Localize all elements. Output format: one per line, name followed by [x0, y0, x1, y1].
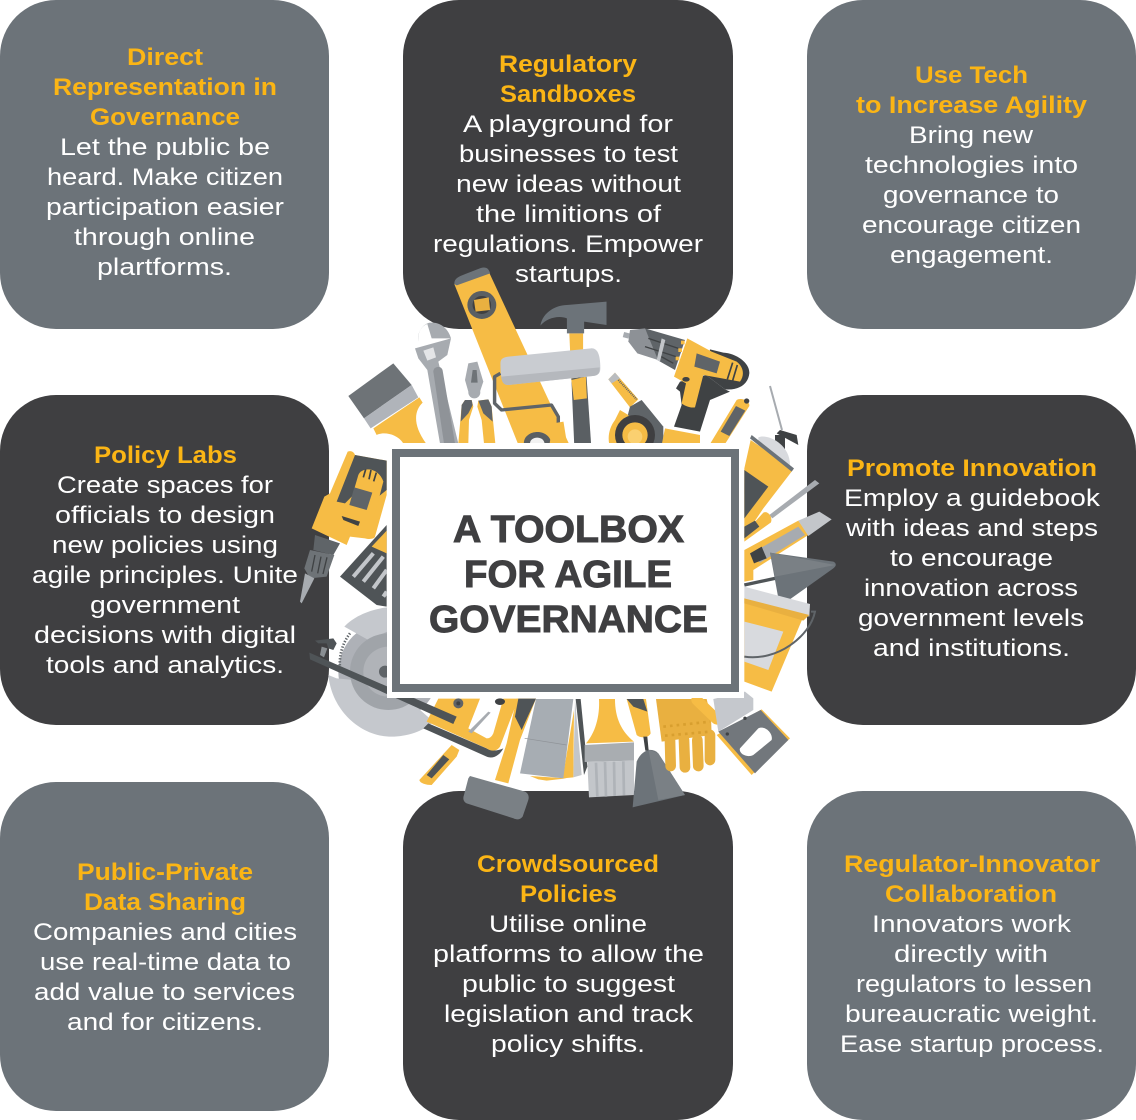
panel: use tech to increase agility: engagement.	[890, 242, 1053, 269]
panel: crowdsourced policies: Crowdsourced	[477, 851, 659, 878]
panel: promote innovation	[807, 395, 1136, 725]
panel: direct representation in governance: through online	[74, 224, 255, 251]
panel: regulator-innovator collaboration: Collaboration	[885, 881, 1057, 908]
panel: regulator-innovator collaboration: directly with	[894, 941, 1048, 968]
panel: promote innovation: and institutions.	[873, 635, 1070, 662]
panel: use tech to increase agility: technologies into	[865, 152, 1078, 179]
panel: regulatory sandboxes: A playground for	[463, 111, 673, 138]
panel: crowdsourced policies: legislation and track	[444, 1001, 694, 1028]
tools: tape measure, drill and screwdriver	[608, 328, 749, 455]
panel: use tech to increase agility: to Increase Agility	[856, 92, 1088, 119]
icon: utility knife	[744, 512, 832, 582]
panel: regulator-innovator collaboration: Regulator-Innovator	[844, 851, 1100, 878]
panel: promote innovation: with ideas and steps	[845, 515, 1098, 542]
panel: promote innovation: Employ a guidebook	[844, 485, 1101, 512]
panel: crowdsourced policies: platforms to allow the	[433, 941, 704, 968]
panel: crowdsourced policies: public to suggest	[462, 971, 675, 998]
panel: regulator-innovator collaboration	[807, 791, 1136, 1120]
panel: regulator-innovator collaboration: bureaucratic weight.	[845, 1001, 1098, 1028]
panel: public-private data sharing	[0, 782, 329, 1111]
panel: public-private data sharing: Data Sharing	[84, 889, 246, 916]
icon: pliers	[458, 362, 495, 443]
icon: cordless drill	[623, 328, 749, 445]
panel: policy labs: Create spaces for	[57, 472, 273, 499]
icon: work glove	[656, 699, 717, 767]
panel: regulatory sandboxes: Regulatory	[499, 51, 638, 78]
title: GOVERNANCE	[429, 599, 708, 641]
panel: policy labs: tools and analytics.	[46, 652, 284, 679]
panel: regulatory sandboxes: the limitions of	[476, 201, 661, 228]
central title box	[387, 443, 744, 698]
panel: policy labs: agile principles. Unite	[32, 562, 298, 589]
icon: adjustable wrench	[415, 323, 458, 443]
panel: use tech to increase agility: encourage citizen	[862, 212, 1081, 239]
icon: claw hammer	[540, 302, 607, 443]
panel: regulator-innovator collaboration: regulators to lessen	[856, 971, 1092, 998]
tools: level, hammer and roller	[454, 268, 607, 443]
tools on the right of the central box	[744, 386, 836, 692]
tools on the left of the central box	[300, 451, 387, 607]
icon: large drill	[300, 451, 387, 603]
panel: crowdsourced policies	[403, 791, 733, 1120]
icon: spatula	[627, 699, 685, 807]
icon: paint roller	[495, 348, 600, 443]
icon: bucket	[744, 587, 815, 692]
icon: colour swatches	[520, 699, 587, 781]
panel: use tech to increase agility	[807, 0, 1136, 329]
panel: direct representation in governance: Representation in	[53, 74, 277, 101]
panel: direct representation in governance: Direct	[127, 44, 203, 71]
panel: crowdsourced policies: policy shifts.	[491, 1031, 645, 1058]
icon: tape measure	[608, 373, 663, 455]
panel: direct representation in governance: Governance	[90, 104, 240, 131]
panel: regulatory sandboxes: businesses to test	[459, 141, 678, 168]
icon: yellow screwdriver	[710, 398, 749, 444]
icon: dark bar clamp	[309, 638, 457, 724]
panel: policy labs: Policy Labs	[94, 442, 237, 469]
panel: crowdsourced policies: Utilise online	[489, 911, 647, 938]
tools: saw, square, screwdriver and mallet	[309, 607, 536, 819]
panel: public-private data sharing: use real-time data to	[40, 949, 291, 976]
panel: use tech to increase agility: Bring new	[909, 122, 1034, 149]
panel: regulatory sandboxes: Sandboxes	[500, 81, 636, 108]
icon: trowel	[744, 553, 836, 603]
panel: regulatory sandboxes: new ideas without	[456, 171, 681, 198]
panel: public-private data sharing: Public-Private	[77, 859, 253, 886]
tools: swatches, brush, spatula, glove and handsaw	[520, 692, 790, 807]
panel: public-private data sharing: Companies and cities	[33, 919, 297, 946]
icon: small screwdriver	[419, 712, 491, 785]
panel: crowdsourced policies: Policies	[520, 881, 617, 908]
title: FOR AGILE	[464, 554, 672, 596]
icon: paint brush	[348, 363, 426, 443]
panel: public-private data sharing: and for citizens.	[67, 1009, 263, 1036]
panel: policy labs: decisions with digital	[34, 622, 296, 649]
panel: use tech to increase agility: Use Tech	[915, 62, 1028, 89]
icon: spirit level	[454, 268, 569, 443]
panel: regulatory sandboxes	[403, 0, 733, 329]
panel: policy labs	[0, 395, 329, 725]
icon: hand saw	[713, 692, 790, 775]
panel: regulatory sandboxes: regulations. Empower	[433, 231, 703, 258]
panel: regulatory sandboxes: startups.	[515, 261, 622, 288]
icon: mallet	[463, 699, 536, 819]
panel: direct representation in governance: plartforms.	[97, 254, 232, 281]
panel: policy labs: new policies using	[52, 532, 278, 559]
panel: promote innovation: Promote Innovation	[847, 455, 1097, 482]
panel: direct representation in governance	[0, 0, 329, 329]
icon: wide paint brush	[585, 699, 634, 797]
panel: policy labs: officials to design	[55, 502, 275, 529]
panel: regulator-innovator collaboration: Innovators work	[872, 911, 1072, 938]
icon: circular saw	[328, 607, 438, 737]
title	[429, 509, 708, 641]
icon: flat screwdriver	[744, 480, 819, 542]
panel: promote innovation: innovation across	[864, 575, 1078, 602]
tools: brush, wrench and pliers	[348, 323, 495, 443]
panel: public-private data sharing: add value to services	[34, 979, 295, 1006]
icon: spray can	[744, 386, 798, 537]
icon: drill bit set	[340, 525, 387, 607]
panel: direct representation in governance: Let the public be	[60, 134, 270, 161]
panel: use tech to increase agility: governance to	[883, 182, 1059, 209]
panel: policy labs: government	[90, 592, 240, 619]
icon: framing square	[423, 698, 518, 757]
panel: direct representation in governance: heard. Make citizen	[47, 164, 283, 191]
title: A TOOLBOX	[453, 509, 685, 551]
panel: regulator-innovator collaboration: Ease startup process.	[840, 1031, 1104, 1058]
panel: promote innovation: to encourage	[890, 545, 1053, 572]
panel: direct representation in governance: participation easier	[46, 194, 284, 221]
panel: promote innovation: government levels	[858, 605, 1084, 632]
